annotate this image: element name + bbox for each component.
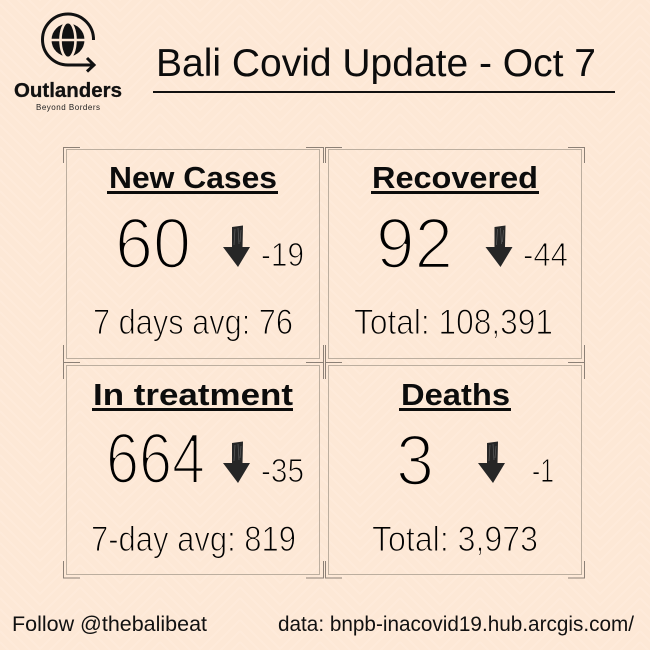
stat: total recovered: Total: 108,391: [354, 303, 553, 342]
stat: 7-day avg: 7-day avg: 819: [91, 520, 296, 559]
icon: globe with arrow: [43, 14, 94, 72]
panel: recovered: [326, 148, 584, 362]
change: -19: -19: [261, 236, 304, 273]
panel: new cases: [64, 148, 324, 362]
footer: follow credit: Follow @thebalibeat: [12, 612, 207, 636]
logo name: Outlanders: [14, 80, 122, 102]
stat: 7 days avg: 7 days avg: 76: [93, 303, 293, 342]
heading: deaths: Deaths: [401, 377, 510, 412]
heading: in treatment: In treatment: [93, 377, 293, 412]
number: 664: 664: [106, 420, 205, 499]
icon: down arrow: [223, 226, 250, 267]
change: -1: -1: [532, 452, 554, 489]
number: 92: 92: [376, 205, 453, 284]
panel: deaths: [326, 362, 584, 578]
icon: down arrow: [223, 442, 250, 483]
logo: Outlanders: [14, 14, 122, 112]
change: -35: -35: [261, 452, 304, 489]
heading: recovered: Recovered: [372, 160, 538, 195]
number: 60: 60: [115, 205, 191, 284]
panel: in treatment: [64, 362, 324, 578]
footer: data source: data: bnpb-inacovid19.hub.arcgis.com/: [278, 612, 634, 636]
logo tagline: Beyond Borders: [36, 103, 100, 112]
title: Bali Covid Update - Oct 7: [156, 42, 596, 85]
change: -44: -44: [523, 236, 568, 273]
number: 3: 3: [396, 422, 434, 501]
icon: down arrow: [478, 442, 505, 483]
heading: new cases: New Cases: [109, 160, 277, 195]
icon: down arrow: [486, 226, 512, 267]
stat: total deaths: Total: 3,973: [372, 520, 538, 559]
